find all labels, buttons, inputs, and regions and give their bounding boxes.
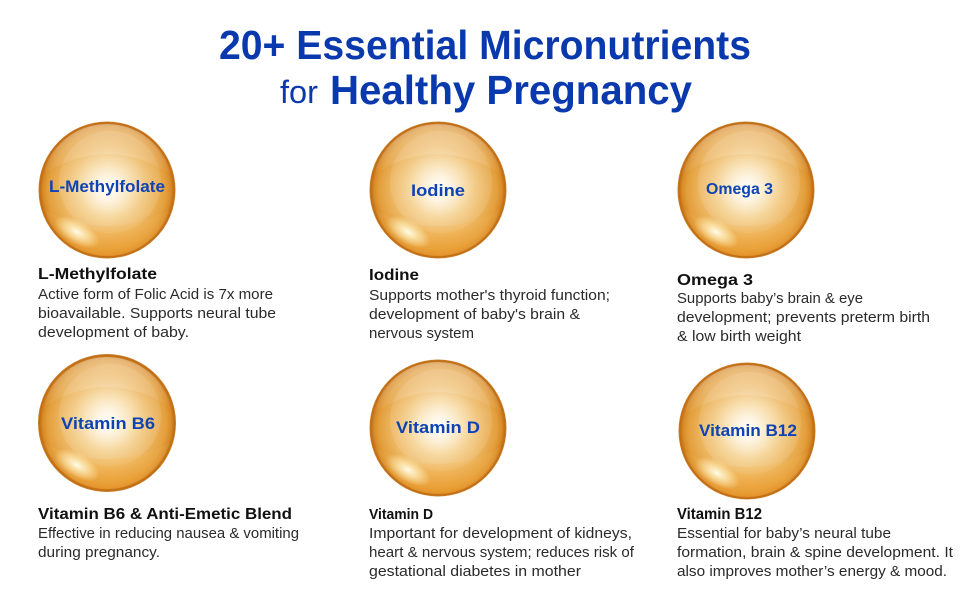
icon: Vitamin B12 capsule	[678, 351, 816, 501]
heading: Vitamin D: Vitamin D	[369, 506, 433, 523]
text block: L-Methylfolate	[38, 287, 276, 341]
text block: Vitamin B12: formation, brain & spine development. It	[677, 545, 953, 561]
text block: L-Methylfolate: development of baby.	[38, 325, 189, 341]
heading: Vitamin B6: Vitamin B6 & Anti-Emetic Blend	[38, 506, 292, 523]
text block: Omega 3	[677, 291, 930, 345]
icon: Vitamin D capsule: Vitamin D	[396, 418, 480, 437]
heading: L-Methylfolate: L-Methylfolate	[38, 266, 157, 283]
icon: Iodine capsule	[370, 110, 506, 260]
text block: Vitamin D	[369, 526, 635, 580]
text block: Omega 3: development; prevents preterm birth	[677, 310, 930, 326]
text block: Vitamin B6: during pregnancy.	[38, 545, 160, 561]
text block: Omega 3: & low birth weight	[677, 329, 801, 345]
text block: Omega 3: Supports baby’s brain & eye	[677, 291, 863, 307]
text block: L-Methylfolate: Active form of Folic Acid is 7x more	[38, 287, 273, 303]
text block: L-Methylfolate: bioavailable. Supports neural tube	[38, 306, 276, 322]
title: for	[280, 74, 318, 110]
title: 20+ Essential Micronutrients	[219, 22, 751, 68]
icon: Omega 3 capsule: Omega 3	[706, 181, 773, 198]
text block: Iodine: development of baby's brain &	[369, 307, 580, 323]
text block: Iodine: Supports mother's thyroid function;	[369, 288, 610, 304]
icon: Vitamin D capsule	[370, 348, 506, 498]
panel: L-Methylfolate	[38, 110, 276, 341]
text block: Vitamin B6	[38, 526, 299, 561]
heading: Vitamin B12: Vitamin B12	[677, 506, 762, 523]
text block: Vitamin D: heart & nervous system; reduces risk of	[369, 545, 635, 561]
icon: Vitamin B6 capsule: Vitamin B6	[61, 414, 155, 433]
text block: Vitamin B6: Effective in reducing nausea & vomiting	[38, 526, 299, 542]
title: Healthy Pregnancy	[330, 67, 692, 113]
panel: Vitamin B12	[677, 351, 953, 580]
text block: Vitamin B12: also improves mother’s energy & mood.	[677, 564, 947, 580]
title	[219, 22, 751, 113]
icon: Iodine capsule: Iodine	[411, 181, 465, 200]
icon: Vitamin B12 capsule: Vitamin B12	[699, 421, 797, 440]
text block: Iodine: nervous system	[369, 326, 474, 342]
text block: Vitamin D: gestational diabetes in mother	[369, 564, 581, 580]
icon: L-Methylfolate capsule: L-Methylfolate	[49, 177, 165, 196]
icon: Vitamin B6 capsule	[38, 343, 176, 493]
heading: Iodine: Iodine	[369, 267, 419, 284]
panel: Vitamin D	[369, 348, 635, 580]
text block: Vitamin B12: Essential for baby’s neural tube	[677, 526, 891, 542]
heading: Omega 3: Omega 3	[677, 272, 753, 289]
panel: Iodine	[369, 110, 610, 342]
icon: Omega 3 capsule	[678, 110, 814, 260]
panel: Omega 3	[677, 110, 930, 345]
text block: Vitamin B12	[677, 526, 953, 580]
icon: L-Methylfolate capsule	[38, 110, 176, 260]
text block: Vitamin D: Important for development of kidneys,	[369, 526, 632, 542]
text block: Iodine	[369, 288, 610, 342]
panel: Vitamin B6	[38, 343, 299, 561]
